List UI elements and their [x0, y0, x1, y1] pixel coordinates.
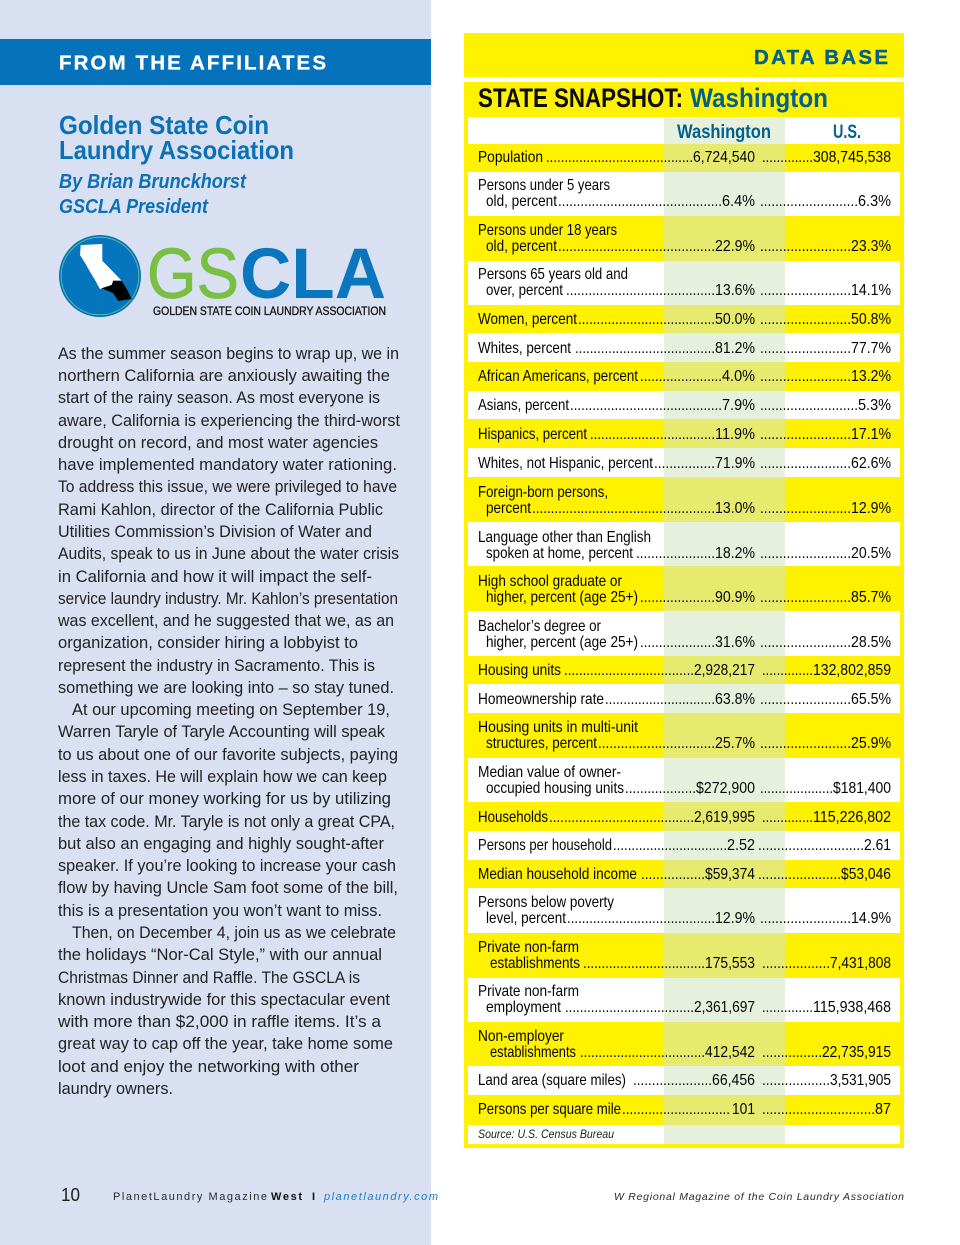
row: private establishments: establishments [490, 955, 580, 972]
row: whites: ........................ [760, 340, 851, 357]
logo: GSCLA: CLA [240, 235, 386, 314]
row: high school: .................... [640, 589, 715, 606]
row: median household income: $53,046 [841, 866, 891, 883]
row: asians: 5.3% [858, 397, 891, 414]
row: persons under 5: .......................... [760, 193, 858, 210]
footer: magazine name: West [271, 1191, 302, 1203]
article body text: something we are looking into – so stay tuned. [58, 679, 394, 697]
article body text: have implemented mandatory water rationing. [58, 456, 397, 474]
row: poverty: Persons below poverty [478, 894, 614, 911]
row: private employment: 2,361,697 [694, 999, 755, 1016]
article body text: represent the industry in Sacramento. This is [58, 657, 375, 675]
row: multi-unit: ............................... [598, 735, 715, 752]
row: whites: ...................................... [575, 340, 715, 357]
row: persons per square mile: 101 [732, 1101, 755, 1118]
row: median household income [478, 866, 891, 883]
logo: GSCLA [59, 235, 386, 318]
row: housing units: 2,928,217 [694, 662, 755, 679]
row: persons under 5: ............................................ [558, 193, 722, 210]
row: persons per household: 2.61 [864, 837, 891, 854]
left panel background [0, 0, 431, 1245]
row: homeownership: Homeownership rate [478, 691, 604, 708]
row: persons per square mile: ............................. [622, 1101, 730, 1118]
row: hispanics: ........................ [760, 426, 851, 443]
article body text: this is a presentation you won’t want to miss. [58, 902, 382, 920]
row: housing units [478, 662, 891, 679]
table column headers: U.S. [833, 122, 861, 143]
article body text: flow by having Uncle Sam foot some of the bill, [58, 879, 398, 897]
footer: magazine name: planetlaundry.com [323, 1191, 438, 1203]
row: persons per household: ............................ [758, 837, 864, 854]
article body text: laundry owners. [58, 1080, 173, 1098]
title: state snapshot: STATE SNAPSHOT: [478, 83, 683, 113]
article body text: northern California are anxiously awaiting the [58, 367, 390, 385]
row: whites [478, 340, 891, 357]
row: persons under 5: 6.3% [858, 193, 891, 210]
row: homeownership: 65.5% [851, 691, 891, 708]
row: foreign-born: 12.9% [851, 500, 891, 517]
row: population: 308,745,538 [813, 149, 891, 166]
row: whites not hispanic: Whites, not Hispanic, percent [478, 455, 654, 472]
row: women [478, 311, 891, 328]
row: multi-unit: 25.7% [715, 735, 755, 752]
row: persons under 18: ........................ [760, 238, 851, 255]
row: private establishments: Private non-farm [478, 939, 579, 956]
footer: magazine name: I [312, 1191, 315, 1203]
article body text: organization, consider hiring a lobbyist to [58, 634, 358, 652]
row: hispanics: .................................. [590, 426, 715, 443]
article heading [59, 110, 294, 165]
row: non-employer: Non-employer [478, 1028, 564, 1045]
row: whites: 77.7% [851, 340, 891, 357]
row: population [478, 149, 891, 166]
row: multi-unit: 25.9% [851, 735, 891, 752]
row: private employment: .............. [762, 999, 813, 1016]
banner: from the affiliates: FROM THE AFFILIATES [59, 52, 326, 74]
row: asians [478, 397, 891, 414]
row: foreign-born [478, 484, 891, 517]
row: land area: 3,531,905 [830, 1072, 891, 1089]
row: african americans: 13.2% [851, 368, 891, 385]
row: bachelor's: ........................ [760, 634, 851, 651]
row: language: 18.2% [715, 545, 755, 562]
title: state snapshot: Washington [690, 83, 828, 113]
row: private establishments: .................. [762, 955, 830, 972]
footer: magazine name: PlanetLaundry Magazine [113, 1191, 267, 1203]
row: persons per square mile: Persons per square mile [478, 1101, 621, 1118]
row: hispanics: Hispanics, percent [478, 426, 588, 443]
article body text: less in taxes. He will explain how we can keep [58, 768, 387, 786]
byline: By Brian Brunckhorst [59, 171, 247, 193]
row: foreign-born: percent [486, 500, 532, 517]
row: whites not hispanic: 62.6% [851, 455, 891, 472]
row: persons per household: ............................... [613, 837, 727, 854]
row: non-employer: .................................. [580, 1044, 705, 1061]
row: median value: ................... [625, 780, 696, 797]
row: poverty: 12.9% [715, 910, 755, 927]
row: multi-unit: Housing units in multi-unit [478, 719, 639, 736]
row: households: 2,619,995 [694, 809, 755, 826]
article body text: the holidays “Nor-Cal Style,” with our annual [58, 946, 382, 964]
article body text: loot and enjoy the networking with other [58, 1058, 360, 1076]
row: language: spoken at home, percent [486, 545, 634, 562]
row: persons under 5: old, percent [486, 193, 558, 210]
row: multi-unit: structures, percent [486, 735, 598, 752]
row: median value [478, 764, 891, 797]
article body text: the tax code. Mr. Taryle is not only a great CPA, [58, 813, 395, 831]
article body text [57, 345, 400, 1098]
row: bachelor's: 28.5% [851, 634, 891, 651]
row: asians: Asians, percent [478, 397, 570, 414]
row: persons under 5: Persons under 5 years [478, 177, 610, 194]
row: persons 65: 13.6% [715, 282, 755, 299]
row: median household income: ...................... [758, 866, 841, 883]
row: women: 50.0% [715, 311, 755, 328]
table column headers [677, 122, 861, 143]
row: whites not hispanic: 71.9% [715, 455, 755, 472]
row: persons per square mile [478, 1101, 891, 1118]
row: whites not hispanic: ................ [654, 455, 715, 472]
row: median value: $181,400 [833, 780, 891, 797]
article body text: known industrywide for this spectacular event [58, 991, 390, 1009]
row: homeownership: 63.8% [715, 691, 755, 708]
row: median value: .................... [760, 780, 833, 797]
row: hispanics: 17.1% [851, 426, 891, 443]
row: hispanics [478, 426, 891, 443]
article heading: Golden State Coin [59, 110, 269, 140]
row: persons per square mile: .............................. [762, 1101, 875, 1118]
row: land area: .................. [762, 1072, 830, 1089]
row: non-employer: establishments [490, 1044, 576, 1061]
footer: regional tagline: W Regional Magazine of the Coin Laundry Association [614, 1191, 904, 1203]
article body text: Then, on December 4, join us as we celebrate [72, 924, 396, 942]
row: households [478, 809, 891, 826]
table column headers: Washington [677, 122, 771, 143]
row: persons under 18: .......................................... [558, 238, 715, 255]
row: persons under 5 [478, 177, 891, 210]
banner: data base: DATA BASE [754, 46, 888, 69]
row: homeownership: ........................ [760, 691, 851, 708]
row: persons under 18 [478, 222, 891, 255]
row: african americans: ........................ [760, 368, 851, 385]
footer: magazine name [113, 1191, 438, 1203]
row: foreign-born: Foreign-born persons, [478, 484, 608, 501]
row: multi-unit: ........................ [760, 735, 851, 752]
row: language: Language other than English [478, 529, 651, 546]
logo: GSCLA: GOLDEN STATE COIN LAUNDRY ASSOCIATION [153, 304, 386, 318]
row: persons under 18: 22.9% [715, 238, 755, 255]
row: median household income: Median household income [478, 866, 637, 883]
row: population: Population [478, 149, 543, 166]
article body text: Warren Taryle of Taryle Accounting will speak [58, 723, 386, 741]
article body text: aware, California is experiencing the third-worst [58, 412, 400, 430]
panel: table frame and row backgrounds [464, 82, 904, 1148]
article body text: To address this issue, we were privileged to have [58, 478, 397, 496]
row: median household income: $59,374 [705, 866, 755, 883]
icon: California map badge [59, 235, 141, 317]
row: persons 65: ........................................ [566, 282, 715, 299]
article body text: great way to cap off the year, take home some [58, 1035, 393, 1053]
article body text: drought on record, and most water agencies [58, 434, 378, 452]
row: non-employer: ................ [762, 1044, 822, 1061]
logo: GSCLA: GS [147, 235, 239, 314]
row: private establishments: 7,431,808 [830, 955, 891, 972]
row: poverty: ........................ [760, 910, 851, 927]
row: persons 65: 14.1% [851, 282, 891, 299]
article body text: start of the rainy season. As most everyone is [58, 389, 380, 407]
row: persons per household: Persons per household [478, 837, 612, 854]
article body text: was excellent, and he suggested that we, as an [57, 612, 394, 630]
row: persons under 18: Persons under 18 years [478, 222, 617, 239]
row: women: 50.8% [851, 311, 891, 328]
row: high school: higher, percent (age 25+) [486, 589, 638, 606]
row: high school: 90.9% [715, 589, 755, 606]
article body text: to us about one of our favorite subjects, paying [58, 746, 398, 764]
row: african americans: ...................... [640, 368, 722, 385]
row: population: ........................................ [546, 149, 693, 166]
row: foreign-born: 13.0% [715, 500, 755, 517]
article body text: speaker. If you’re looking to increase your cash [58, 857, 396, 875]
row: median value: $272,900 [696, 780, 755, 797]
row: housing units: ................................... [564, 662, 694, 679]
row: median value: Median value of owner- [478, 764, 621, 781]
row: land area: ..................... [633, 1072, 712, 1089]
row: whites not hispanic: ........................ [760, 455, 851, 472]
row: households: .............. [762, 809, 813, 826]
article body text: As the summer season begins to wrap up, we in [58, 345, 399, 363]
row: persons under 5: 6.4% [722, 193, 755, 210]
row: households: Households [478, 809, 548, 826]
row: language: ..................... [636, 545, 715, 562]
row: housing units: .............. [762, 662, 813, 679]
row: private employment: Private non-farm [478, 983, 579, 1000]
row: persons 65: Persons 65 years old and [478, 266, 628, 283]
row: non-employer [478, 1028, 891, 1061]
table source note: Source: U.S. Census Bureau [478, 1129, 615, 1141]
row: asians: ......................................... [570, 397, 722, 414]
row: african americans: African Americans, percent [478, 368, 639, 385]
row: private employment: 115,938,468 [813, 999, 891, 1016]
row: poverty: ........................................ [567, 910, 715, 927]
table rows [478, 149, 891, 1118]
article body text: Audits, speak to us in June about the water crisis [58, 545, 399, 563]
footer: page number: 10 [61, 1185, 80, 1205]
row: language [478, 529, 891, 562]
row: high school: ........................ [760, 589, 851, 606]
row: bachelor's [478, 618, 891, 651]
row: persons under 18: old, percent [486, 238, 558, 255]
row: persons per household: 2.52 [727, 837, 755, 854]
row: land area: Land area (square miles) [478, 1072, 626, 1089]
row: whites: 81.2% [715, 340, 755, 357]
row: private establishments [478, 939, 891, 972]
row: persons 65: ........................ [760, 282, 851, 299]
row: bachelor's: .................... [640, 634, 715, 651]
row: language: 20.5% [851, 545, 891, 562]
row: high school: 85.7% [851, 589, 891, 606]
row: high school [478, 573, 891, 606]
row: language: ........................ [760, 545, 851, 562]
row: women: Women, percent [478, 311, 578, 328]
row: population: .............. [762, 149, 813, 166]
row: poverty [478, 894, 891, 927]
row: women: ..................................... [578, 311, 715, 328]
row: poverty: level, percent [486, 910, 567, 927]
row: bachelor's: Bachelor’s degree or [478, 618, 601, 635]
row: women: ........................ [760, 311, 851, 328]
row: african americans: 4.0% [722, 368, 755, 385]
byline [59, 171, 247, 218]
banner: data base [464, 33, 904, 77]
row: persons per household [478, 837, 891, 854]
row: homeownership: .............................. [605, 691, 715, 708]
row: non-employer: 22,735,915 [822, 1044, 891, 1061]
article body text: more of our money working for us by utilizing [58, 790, 391, 808]
row: asians: .......................... [760, 397, 858, 414]
row: persons under 18: 23.3% [851, 238, 891, 255]
row: land area: 66,456 [712, 1072, 755, 1089]
row: private employment: ................................... [565, 999, 694, 1016]
article body text: service laundry industry. Mr. Kahlon’s presentation [58, 590, 398, 608]
row: private establishments: ................................. [583, 955, 705, 972]
article body text: At our upcoming meeting on September 19, [72, 701, 390, 719]
row: households: 115,226,802 [813, 809, 891, 826]
article body text: Utilities Commission’s Division of Water and [58, 523, 372, 541]
banner: from the affiliates [0, 39, 431, 85]
row: private employment: employment [486, 999, 562, 1016]
row: persons per square mile: 87 [875, 1101, 891, 1118]
row: african americans [478, 368, 891, 385]
row: high school: High school graduate or [478, 573, 622, 590]
article body text: Christmas Dinner and Raffle. The GSCLA is [58, 969, 360, 987]
row: housing units: Housing units [478, 662, 561, 679]
row: population: 6,724,540 [693, 149, 755, 166]
row: land area [478, 1072, 891, 1089]
row: whites: Whites, percent [478, 340, 572, 357]
article body text: in California and how it will impact the self- [58, 568, 372, 586]
row: bachelor's: 31.6% [715, 634, 755, 651]
row: median value: occupied housing units [486, 780, 624, 797]
row: non-employer: 412,542 [705, 1044, 755, 1061]
row: foreign-born: ........................ [760, 500, 851, 517]
article heading: Laundry Association [59, 135, 294, 165]
row: households: ....................................... [549, 809, 694, 826]
row: median household income: ................. [641, 866, 705, 883]
row: homeownership [478, 691, 891, 708]
article body text: but also an engaging and highly sought-after [58, 835, 384, 853]
article body text: with more than $2,000 in raffle items. It’s a [57, 1013, 382, 1031]
row: persons 65 [478, 266, 891, 299]
row: foreign-born: ................................................. [532, 500, 715, 517]
row: hispanics: 11.9% [715, 426, 755, 443]
article body text: Rami Kahlon, director of the California Public [58, 501, 383, 519]
row: bachelor's: higher, percent (age 25+) [486, 634, 638, 651]
row: asians: 7.9% [722, 397, 755, 414]
row: multi-unit [478, 719, 891, 752]
row: private employment [478, 983, 891, 1016]
row: private establishments: 175,553 [705, 955, 755, 972]
row: poverty: 14.9% [851, 910, 891, 927]
byline: GSCLA President [59, 196, 209, 218]
row: persons 65: over, percent [486, 282, 564, 299]
row: housing units: 132,802,859 [813, 662, 891, 679]
row: whites not hispanic [478, 455, 891, 472]
